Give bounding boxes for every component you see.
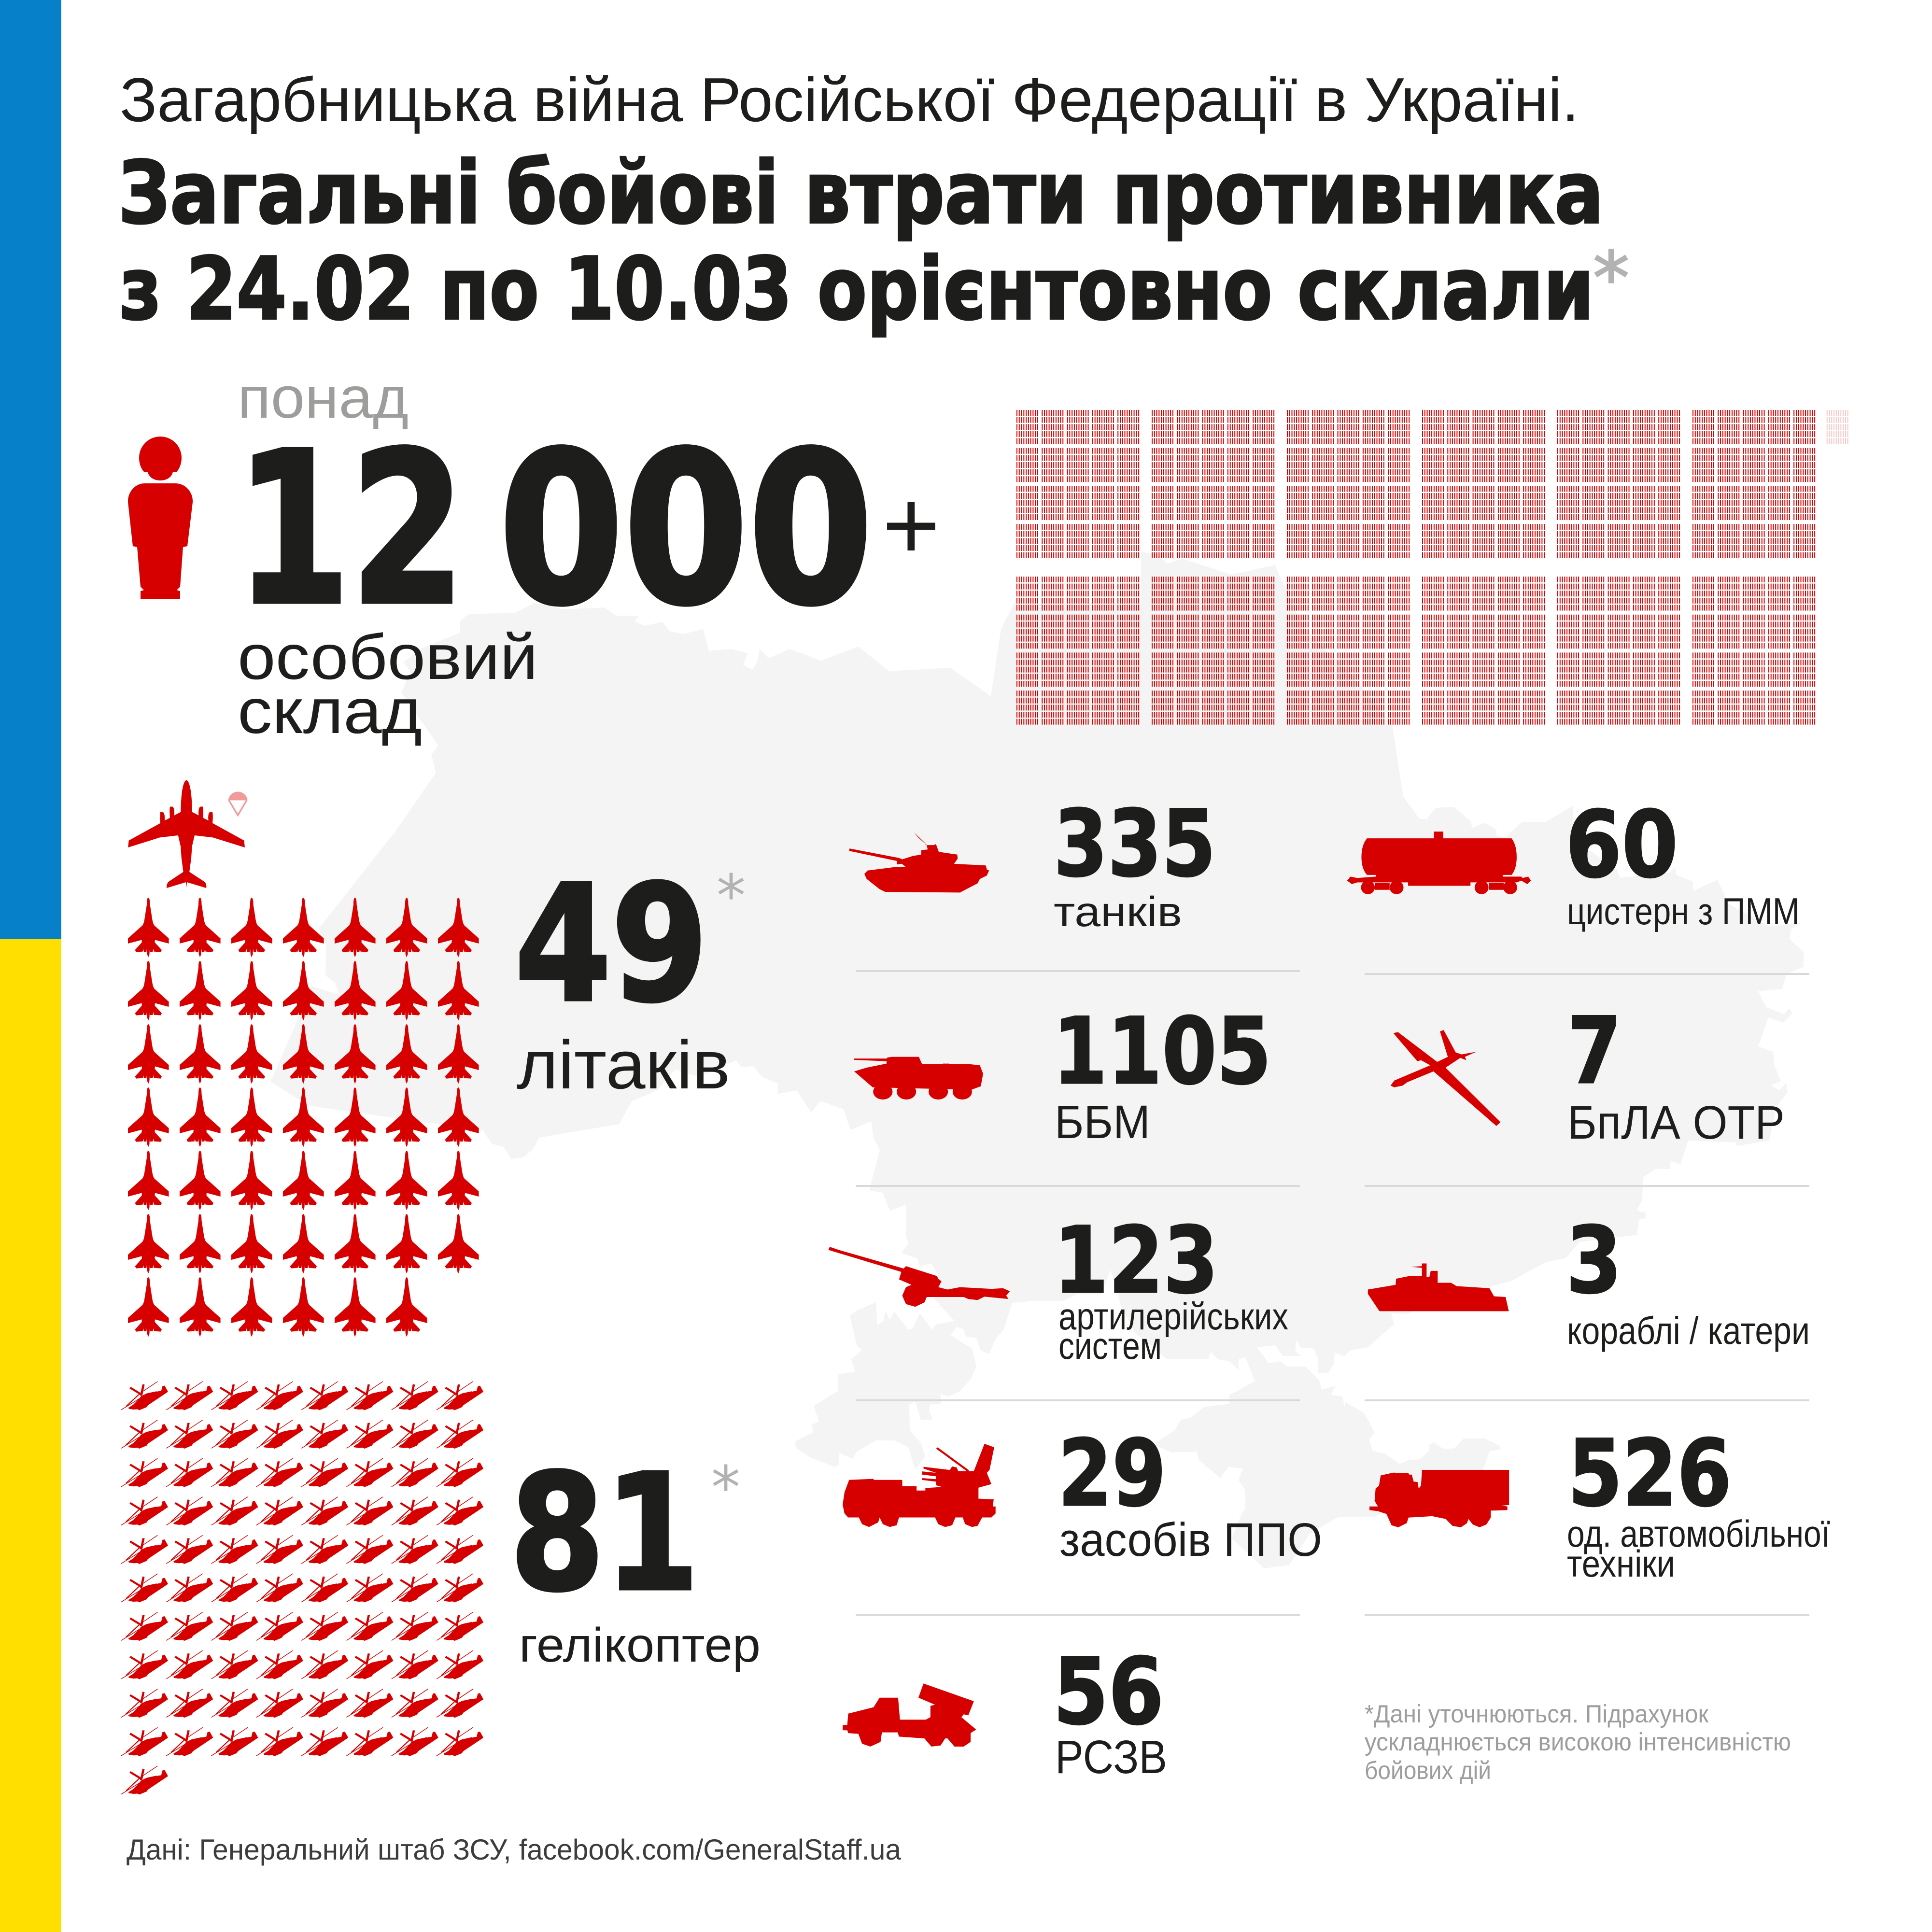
stat: drones [1391,998,1785,1149]
number: 56 [1053,1638,1164,1745]
icon: rail tank car [1347,832,1531,894]
asterisk: * [711,1454,740,1522]
number: 7 [1567,998,1622,1104]
flag stripe: blue and yellow [0,0,61,1932]
number: 60 [1565,791,1678,898]
subtitle line: Загарбницька війна Російської Федерації в Україні. [120,65,1579,135]
label: БпЛА ОТР [1567,1096,1785,1149]
icon: soldier figure [128,437,193,599]
icon: parachute [228,791,248,815]
icon: howitzer [828,1247,1010,1307]
stat: trucks [1369,1420,1830,1585]
headline asterisk: * [1593,237,1629,321]
map of Ukraine silhouette [270,552,1804,1568]
icon: transport plane [128,780,245,888]
big number 12 000 [236,408,873,651]
source line: Дані: Генеральний штаб ЗСУ, facebook.com/GeneralStaff.ua [127,1833,902,1866]
stat: rocket launchers [843,1638,1167,1783]
number: 49: 49 [515,851,708,1038]
icon: truck [1369,1470,1509,1527]
asterisk: * [717,863,746,930]
number: 123 [1054,1207,1218,1314]
number: 335 [1054,790,1216,897]
label: ББМ [1055,1096,1150,1148]
helicopter section [121,1382,761,1794]
label: over: понад [238,365,409,430]
stat: artillery [828,1207,1288,1367]
number: 29 [1058,1420,1166,1527]
icon: tank [849,832,989,892]
label: кораблі / катери [1567,1309,1810,1352]
label line 2: техніки [1567,1542,1675,1585]
label line 1: од. автомобільної [1567,1512,1830,1555]
plus sign: + [882,470,940,580]
stat: air defence [843,1420,1322,1566]
dividers [856,970,1809,1616]
pictogram: fighter jets [128,898,479,1337]
footnote: бойових дій [1365,1757,1491,1785]
footnote: ускладнюється високою інтенсивністю [1365,1728,1791,1756]
label: цистерн з ПММ [1567,890,1800,932]
headline line 2: з 24.02 по 10.03 орієнтовно склали [119,239,1594,339]
icon: rocket launcher [843,1683,976,1747]
label: personnel line 2: склад [238,676,422,747]
footnote: *Дані уточнюються. Підрахунок [1365,1700,1708,1728]
number: 3 [1566,1207,1622,1314]
label: aircraft: літаків [517,1027,730,1103]
big number 12 000: 12 [236,408,465,651]
big number 12 000: 000 [499,408,873,651]
icon: air defence vehicle [843,1444,996,1527]
number: 81: 81 [510,1440,699,1627]
aircraft section [128,780,746,1337]
stat: armoured vehicles [854,998,1271,1148]
number: 526 [1568,1420,1732,1527]
icon: drone [1391,1030,1500,1126]
title block [118,65,1629,339]
number: 1105 [1053,998,1271,1105]
label: танків [1054,888,1182,935]
label: засобів ППО [1059,1513,1322,1566]
icon: armoured vehicle [854,1057,983,1100]
label line 2: систем [1058,1325,1162,1367]
label: helicopters: гелікоптер [519,1618,761,1672]
tally grid: 12 000 bars [1017,410,1848,725]
stat: tanks [849,790,1216,935]
personnel section [128,365,1848,747]
label: РСЗВ [1055,1731,1167,1783]
footnote [1365,1700,1791,1785]
label: personnel: особовий [238,621,538,692]
stat: fuel tankers [1347,791,1800,932]
pictogram: helicopters [121,1382,483,1794]
stat: ships [1368,1207,1810,1352]
icon: ship [1368,1264,1509,1311]
headline line 1: Загальні бойові втрати противника [118,143,1604,243]
label line 1: артилерійських [1058,1295,1288,1338]
